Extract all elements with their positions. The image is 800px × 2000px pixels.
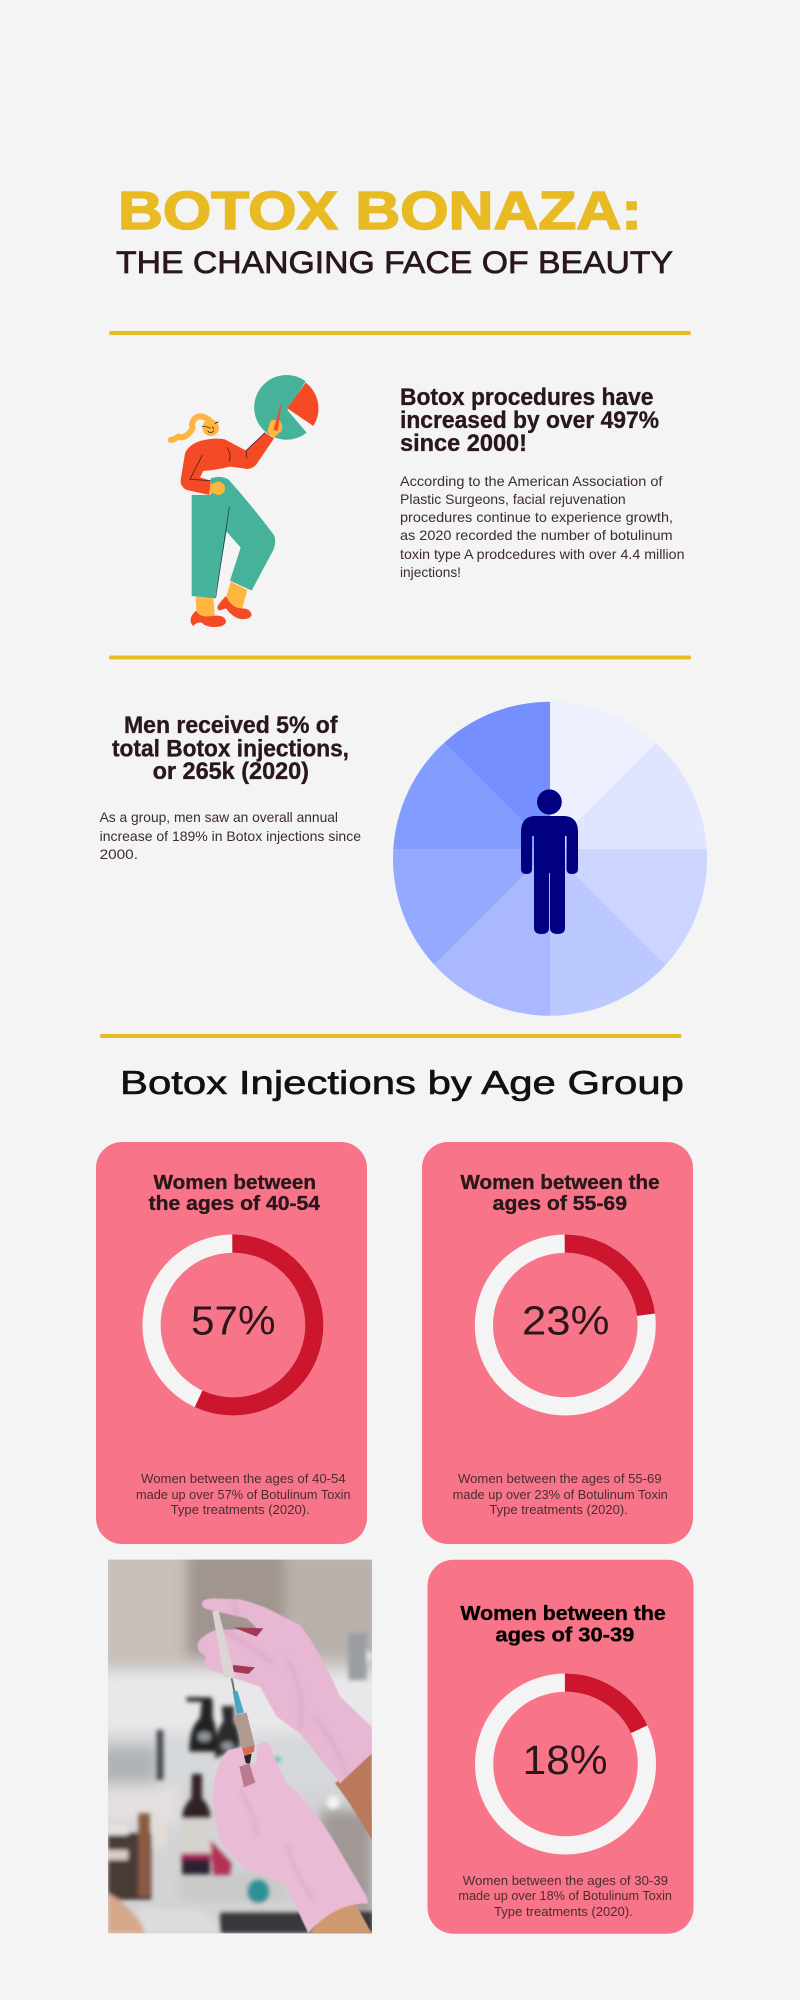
heading: increased by over 497% [400,407,659,434]
legs [196,597,215,622]
chart: radial wheel with male figure [393,702,707,1016]
description [453,1472,668,1517]
paragraph: increase of 189% in Botox injections since [100,828,361,844]
heading: or 265k (2020) [153,758,309,785]
title: BOTOX BONAZA: [118,181,642,241]
heading: Women between [154,1172,316,1194]
paragraph: as 2020 recorded the number of botulinum [400,527,673,543]
description: Women between the ages of 30-39 [463,1874,668,1888]
heading: total Botox injections, [112,736,349,763]
upper glove [198,1598,372,1783]
heading: Botox procedures have [400,384,654,411]
heading: Men received 5% of [124,712,338,739]
heading [460,1172,660,1215]
paragraph [100,809,361,862]
description: made up over 23% of Botulinum Toxin [453,1488,668,1502]
value: 18% [523,1737,608,1783]
heading: ages of 30-39 [495,1625,634,1647]
heading [460,1603,666,1647]
heading: Women between the [460,1172,660,1194]
heading: ages of 55-69 [493,1193,627,1215]
arms [335,1753,372,1840]
donut chart 18% [484,1683,647,1845]
description: made up over 57% of Botulinum Toxin [136,1488,351,1502]
paragraph: toxin type A prodcedures with over 4.4 million [400,546,684,562]
paragraph: Plastic Surgeons, facial rejuvenation [400,491,626,507]
title [116,181,673,280]
icon: pie chart [254,375,319,440]
syringe lower part [239,1753,255,1787]
illustration: woman pointing at pie chart [171,375,319,627]
description [136,1472,351,1517]
pointer [273,401,282,431]
heading: Women between the [460,1603,666,1625]
wheel [393,702,707,1016]
title: THE CHANGING FACE OF BEAUTY [116,244,673,280]
text block: men [100,712,361,862]
description: made up over 18% of Botulinum Toxin [458,1889,672,1903]
text block: procedures increase [400,384,684,580]
paragraph: 2000. [100,846,138,862]
heading [400,384,659,457]
section heading: Botox Injections by Age Group [120,1064,684,1101]
paragraph: According to the American Association of [400,473,663,489]
photo: gloved hands holding syringe [100,1550,383,1933]
paragraph: injections! [400,564,461,580]
hair [171,416,209,440]
icon: man [521,789,578,934]
heading: the ages of 40-54 [149,1193,321,1215]
heading [112,712,349,785]
lower glove [213,1742,368,1933]
description [458,1874,672,1919]
heading: since 2000! [400,430,527,457]
donut chart 57% [151,1244,314,1406]
description: Type treatments (2020). [494,1905,633,1919]
paragraph: procedures continue to experience growth, [400,509,673,525]
description: Type treatments (2020). [171,1503,310,1517]
top [181,433,274,495]
shoes [191,611,226,627]
description: Women between the ages of 40-54 [141,1472,346,1486]
description: Women between the ages of 55-69 [458,1472,662,1486]
value: 57% [191,1298,276,1344]
paragraph [400,473,684,580]
blurred background [100,1550,383,1933]
description: Type treatments (2020). [489,1503,628,1517]
heading [149,1172,321,1215]
panel: women 40-54 [96,1142,367,1544]
hands [212,482,225,495]
donut chart 23% [484,1244,647,1406]
panel: women 30-39 [428,1560,694,1934]
value: 23% [522,1298,609,1344]
trousers [192,477,275,598]
head [202,419,219,436]
syringe upper part [212,1610,255,1756]
paragraph: As a group, men saw an overall annual [100,809,338,825]
panel: women 55-69 [422,1142,693,1544]
